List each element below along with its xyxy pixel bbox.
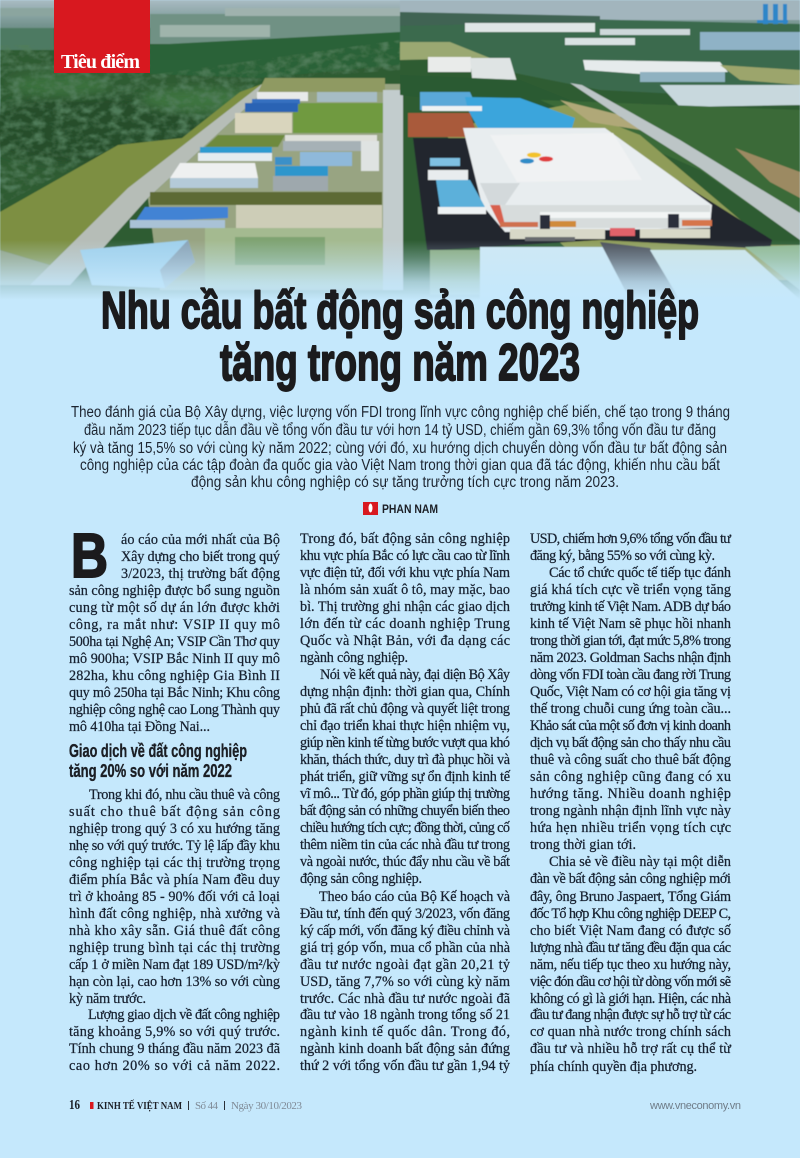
column 2 paragraph 2: thêm niềm tin của các nhà đầu tư trong <box>300 837 510 853</box>
section tab: Tiêu điểm <box>54 0 150 73</box>
column 2 paragraph 1 <box>300 531 510 666</box>
column 2 paragraph 3: trước. Các nhà đầu tư nước ngoài đã <box>300 991 511 1007</box>
column 3 paragraph 3: đốc Tổ hợp Khu công nghiệp DEEP C, <box>530 906 731 922</box>
column 2 paragraph 2: Nói về kết quả này, đại diện Bộ Xây <box>320 667 511 683</box>
subheading: Giao dịch về đất công nghiệp <box>69 741 247 761</box>
column 2 paragraph 1: là nhóm sản xuất ô tô, may mặc, bao <box>300 582 510 598</box>
column 2 paragraph 3: đầu tư nước ngoài đạt gần 20,21 tỷ <box>300 957 511 973</box>
column 1 paragraph 2: Trong khi đó, nhu cầu thuê và công <box>89 787 280 803</box>
column 2 paragraph 3: Đầu tư, tính đến quý 3/2023, vốn đăng <box>300 906 510 922</box>
column 2 paragraph 1: Trong đó, bất động sản công nghiệp <box>300 531 510 547</box>
photo fade into background <box>0 240 800 300</box>
byline <box>363 502 438 516</box>
cranes <box>757 4 788 24</box>
column 1 paragraph 2: kỳ năm trước. <box>69 991 146 1007</box>
grass slope <box>0 84 262 268</box>
column 1 paragraph 3 <box>69 1007 281 1074</box>
column 3 paragraph 2: sản công nghiệp cũng đang có xu <box>530 769 731 785</box>
column 1 paragraph 2: hình đất công nghiệp, nhà xưởng và <box>69 906 281 922</box>
column 1 paragraph 1: sản công nghiệp được bổ sung nguồn <box>69 583 280 599</box>
column 1 paragraph 1: mô 900ha; VSIP Bắc Ninh II quy mô <box>69 651 280 667</box>
column 3 paragraph 2: trong ngành nhận định lĩnh vực này <box>530 803 732 819</box>
column 2 paragraph 3: giá trị góp vốn, mua cổ phần của nhà <box>300 940 511 956</box>
column 2 paragraph 3: đầu tư vào 18 ngành trong tổng số 21 <box>300 1007 510 1023</box>
column 3 paragraph 2 <box>530 565 732 853</box>
column 3 paragraph 2: trưởng kinh tế Việt Nam. ADB dự báo <box>530 599 731 615</box>
column 1 paragraph 2: trì ở khoảng 85 - 90% đối với cả loại <box>69 889 280 905</box>
column 3 paragraph 2: thế trong chuỗi cung ứng toàn cầu... <box>530 701 731 717</box>
column 3 paragraph 2: năm 2023. Goldman Sachs nhận định <box>530 650 731 666</box>
column 2 paragraph 3: USD, tăng 7,7% so với cùng kỳ năm <box>300 974 510 990</box>
column 2 paragraph 3: ngành kinh tế quốc dân. Trong đó, <box>300 1024 510 1040</box>
column 2 paragraph 1: ngành công nghiệp. <box>300 650 408 666</box>
column 2 paragraph 3: ngành kinh doanh bất động sản đứng <box>300 1041 510 1057</box>
column 1 paragraph 1: cung từ một số dự án lớn được khởi <box>69 600 280 616</box>
intro text: công nghiệp của các tập đoàn đa quốc gia vào Việt Nam trong thời gian qua đã tác động, khiến nhu cầu bất <box>80 457 721 474</box>
right side main park <box>420 92 478 110</box>
column 2 paragraph 2: giúp nền kinh tế từng bước vượt qua khó <box>300 735 510 751</box>
column 3 paragraph 1 <box>530 531 732 564</box>
column 1 paragraph 1: nghiệp công nghệ cao Long Thành quy <box>69 702 281 718</box>
column 2 paragraph 2: vĩ mô... Từ đó, góp phần giúp thị trường <box>300 786 510 802</box>
column 1 paragraph 3: Tính chung 9 tháng đầu năm 2023 đã <box>69 1041 281 1057</box>
column 2 paragraph 2: bất động sản có những chuyển biến theo <box>300 803 510 819</box>
footer: folio and issue: 16 <box>69 1098 80 1113</box>
column 1 paragraph 3: tăng khoảng 5,9% so với quý trước. <box>69 1024 280 1040</box>
foreground <box>430 250 490 295</box>
column 3 paragraph 1: đăng ký, bằng 55% so với cùng kỳ. <box>530 548 715 564</box>
column 1 paragraph 1: mô 410ha tại Đồng Nai... <box>69 719 210 735</box>
column 2 paragraph 2: khăn, thách thức, duy trì đà phục hồi và <box>300 752 511 768</box>
column 2 paragraph 2: dựng nhận định: thời gian qua, Chính <box>300 684 510 700</box>
title <box>101 282 699 392</box>
column 3 paragraph 2: trong thời gian tới. <box>530 837 636 853</box>
column 1 paragraph 2: hạn còn lại, cao hơn 13% so với cùng <box>69 974 280 990</box>
aerial photo of industrial park <box>0 0 800 300</box>
column 2 paragraph 3: ký cấp mới, vốn đăng ký điều chỉnh và <box>300 923 511 939</box>
intro text: động sản khu công nghiệp có sự tăng trưởng tích cực trong năm 2023. <box>191 474 619 491</box>
column 1 paragraph 1: 3/2023, thị trường bất động <box>121 566 280 582</box>
road right <box>570 83 800 240</box>
column 3 paragraph 3: cơ quan nhà nước trong chính sách <box>530 1024 731 1040</box>
intro text <box>71 404 730 491</box>
column 2 paragraph 1: Quốc và Nhật Bản, với đa dạng các <box>300 633 510 649</box>
column 3 paragraph 2: dịch vụ bất động sản cho thấy nhu cầu <box>530 735 731 751</box>
column 2 paragraph 3: Theo báo cáo của Bộ Kế hoạch và <box>319 889 511 905</box>
column 3 paragraph 2: Các tổ chức quốc tế tiếp tục đánh <box>549 565 731 581</box>
column 3 paragraph 3: đầu tư và nhiều hỗ trợ rất cụ thể từ <box>530 1041 732 1057</box>
column 3 paragraph 3: không có gì là giới hạn. Hiện, các nhà <box>530 991 732 1007</box>
column 2 paragraph 1: khu vực phía Bắc có lực cầu cao từ lĩnh <box>300 548 510 564</box>
column 1 paragraph 2: nhà kho xây sẵn. Giá thuê đất công <box>69 923 280 939</box>
right side far landscape <box>400 15 800 100</box>
column 1 paragraph 3: cao hơn 20% so với cả năm 2022. <box>69 1058 280 1074</box>
column 2 paragraph 3 <box>300 889 511 1074</box>
roof logo <box>527 152 541 158</box>
park ground left <box>148 84 400 290</box>
column 3 paragraph 3: phía chính quyền địa phương. <box>530 1059 697 1075</box>
column 3 paragraph 3: lượng nhà đầu tư tăng đều đặn qua các <box>530 940 731 956</box>
column 2 paragraph 2: phủ đã rất chủ động và quyết liệt trong <box>300 701 510 717</box>
column 2 paragraph 3: thứ 2 với tổng vốn đầu tư gần 1,94 tỷ <box>300 1058 511 1074</box>
column 3 paragraph 2: giá khá tích cực về triển vọng tăng <box>530 582 731 598</box>
column 2 paragraph 2: và ngoài nước, thúc đẩy nhu cầu về bất <box>300 854 510 870</box>
footer: website: www.vneconomy.vn <box>649 1100 741 1112</box>
column 3 paragraph 3 <box>530 854 732 1075</box>
column 3 paragraph 3: đầu tư đang nhận được sự hỗ trợ từ các <box>530 1007 731 1023</box>
column 3 paragraph 3: năm, nếu tiếp tục theo xu hướng này, <box>530 957 731 973</box>
main road left <box>30 84 272 285</box>
column 2 paragraph 2: chiều hướng tích cực; đồng thời, củng cố <box>300 820 510 836</box>
column 3 paragraph 2: hướng tăng. Nhiều doanh nghiệp <box>530 786 731 802</box>
column 2 paragraph 2: phát triển, giữ vững sự ổn định kinh tế <box>300 769 511 785</box>
column 1 paragraph 2: nghiệp trung bình tại các thị trường <box>69 940 280 956</box>
column 3 paragraph 3: Chia sẻ về điều này tại một diễn <box>549 854 731 870</box>
column 1 paragraph 2: nhẹ so với quý trước. Tỷ lệ lấp đầy khu <box>69 838 280 854</box>
subheading <box>69 741 247 781</box>
column 3 paragraph 2: Khảo sát của một số đơn vị kinh doanh <box>530 718 731 734</box>
column 1 paragraph 1: Xây dựng cho biết trong quý <box>121 549 281 565</box>
footer: folio and issue <box>69 1098 302 1113</box>
subheading: tăng 20% so với năm 2022 <box>69 761 232 781</box>
column 3 paragraph 2: Quốc, Việt Nam có cơ hội gia tăng vị <box>530 684 731 700</box>
column 1 paragraph 2 <box>69 787 281 1007</box>
column 3 paragraph 2: hứa hẹn nhiều triển vọng tích cực <box>530 820 731 836</box>
column 1 paragraph 2: cấp 1 ở miền Nam đạt 189 USD/m²/kỳ <box>69 957 281 973</box>
byline: PHAN NAM <box>382 502 438 516</box>
title: tăng trong năm 2023 <box>220 334 580 392</box>
column 2 paragraph 1: bì. Thị trường ghi nhận các giao dịch <box>300 599 510 615</box>
column 3 paragraph 3: cho biết Việt Nam đang có được số <box>530 923 731 939</box>
column 1 paragraph 1: quy mô 250ha tại Bắc Ninh; Khu công <box>69 685 280 701</box>
column 3 paragraph 2: trong thời gian tới, đạt mức 5,8% trong <box>530 633 731 649</box>
column 3 paragraph 1: USD, chiếm hơn 9,6% tổng vốn đầu tư <box>530 531 732 547</box>
column 1 paragraph 2: suất cho thuê bất động sản công <box>69 804 280 820</box>
column 1 paragraph 2: nghiệp trong quý 3 có xu hướng tăng <box>69 821 280 837</box>
column 1 paragraph 2: điểm phía Bắc và phía Nam đều duy <box>69 872 281 888</box>
footer: folio and issue: Ngày 30/10/2023 <box>231 1100 302 1112</box>
drop cap: B <box>71 522 108 591</box>
column 3 paragraph 2: dòng vốn FDI toàn cầu đang rời Trung <box>530 667 731 683</box>
column 1 paragraph 1: công, ra mắt như: VSIP II quy mô <box>69 617 280 633</box>
column 1 paragraph 2: công nghiệp tại các thị trường trọng <box>69 855 280 871</box>
column 1 paragraph 1 <box>69 532 281 735</box>
footer: folio and issue: KINH TẾ VIỆT NAM <box>97 1099 182 1112</box>
footer: folio and issue: Số 44 <box>195 1100 218 1112</box>
column 2 paragraph 2 <box>300 667 511 887</box>
column 1 paragraph 3: Lượng giao dịch về đất công nghiệp <box>88 1007 280 1023</box>
column 1 paragraph 1: áo cáo của mới nhất của Bộ <box>121 532 280 548</box>
column 2 paragraph 2: động sản công nghiệp. <box>300 871 422 887</box>
column 1 paragraph 1: 500ha tại Nghệ An; VSIP Cần Thơ quy <box>69 634 281 650</box>
column 3 paragraph 3: việc đón dầu cơ hội từ dòng vốn mới sẽ <box>530 974 731 990</box>
column 2 paragraph 1: vực điện tử, đối với khu vực phía Nam <box>300 565 510 581</box>
column 2 paragraph 2: chỉ đạo triển khai thực hiện nhiệm vụ, <box>300 718 510 734</box>
column 3 paragraph 2: kinh tế Việt Nam sẽ phục hồi nhanh <box>530 616 731 632</box>
section tab: Tiêu điểm: Tiêu điểm <box>61 51 140 73</box>
column 3 paragraph 2: thuê và công suất cho thuê bất động <box>530 752 731 768</box>
column 3 paragraph 3: đàn về bất động sản công nghiệp mới <box>530 871 731 887</box>
column 3 paragraph 3: đây, ông Bruno Jaspaert, Tổng Giám <box>530 889 731 905</box>
column 1 paragraph 1: 282ha, khu công nghiệp Gia Bình II <box>69 668 280 684</box>
column 2 paragraph 1: lớn đến từ các doanh nghiệp Trung <box>300 616 510 632</box>
